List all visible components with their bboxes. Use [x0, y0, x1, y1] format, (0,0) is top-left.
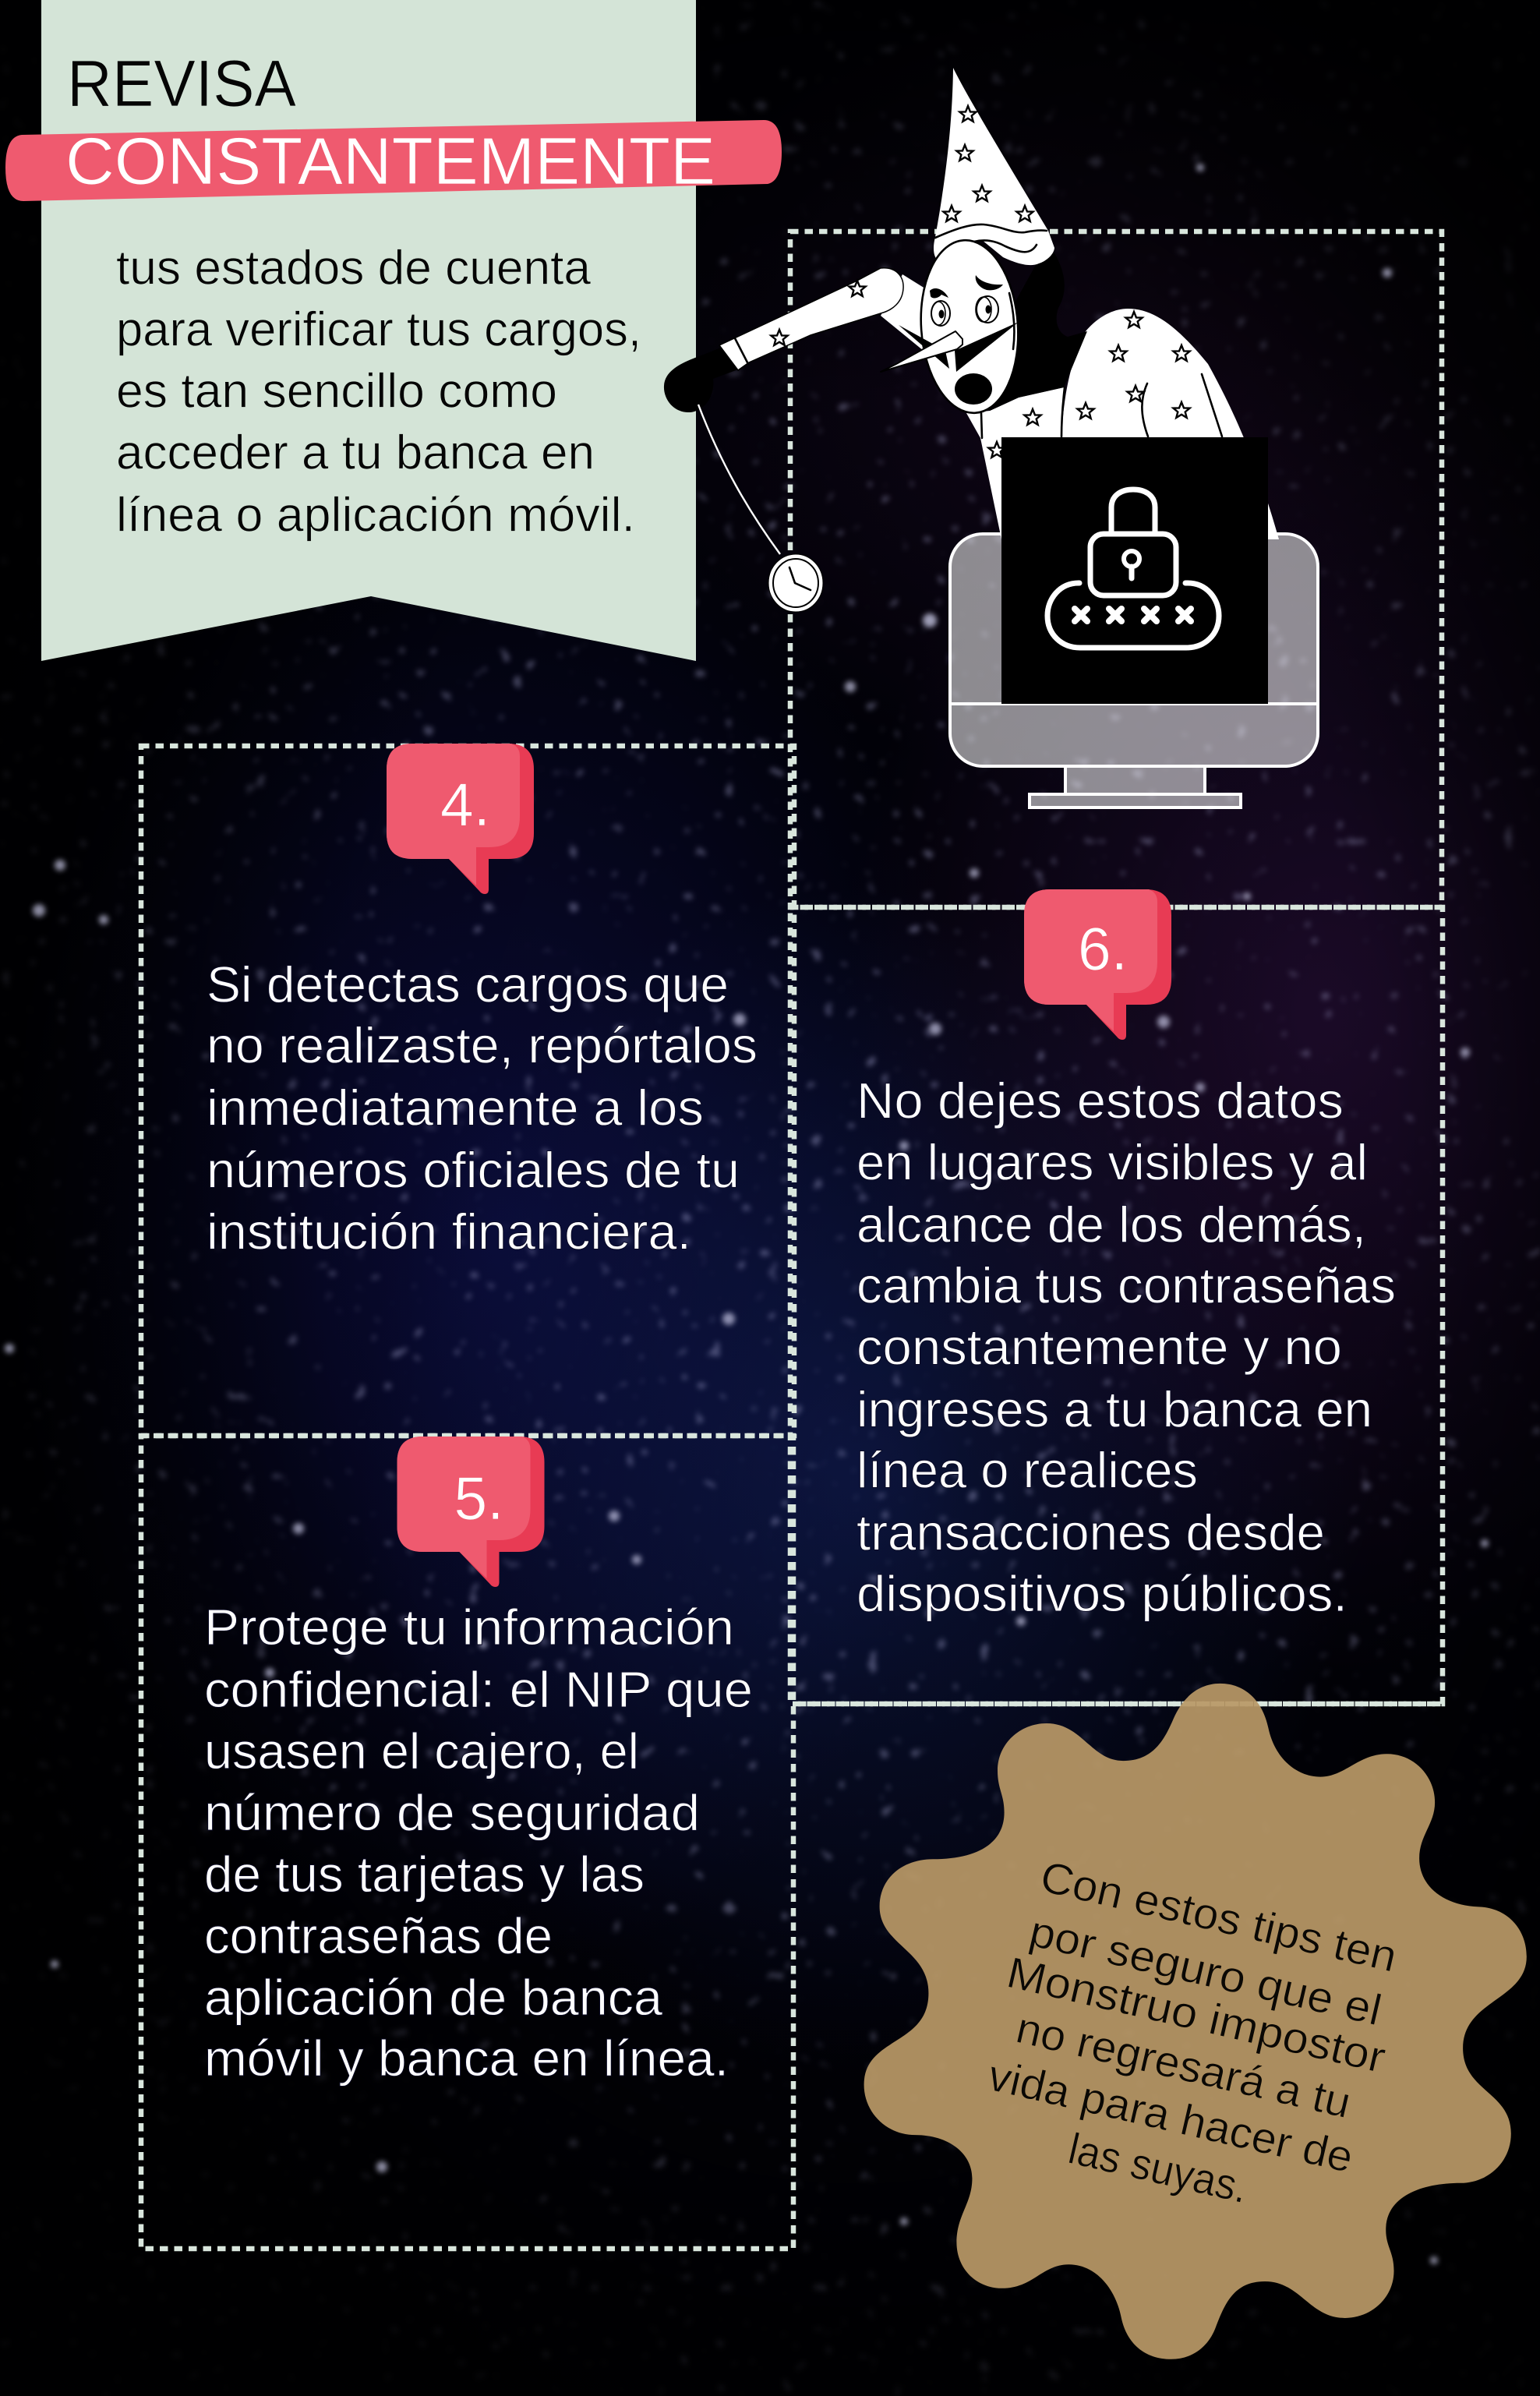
text block: tip 6: línea o realices: [857, 1442, 1198, 1498]
blob shape: [864, 1684, 1527, 2359]
text block: tip 5: móvil y banca en línea.: [204, 2030, 729, 2087]
dashed frame: tip 6: [790, 907, 1443, 1704]
closing text: Monstruo impostor: [1002, 1947, 1390, 2082]
text block: tip 6: alcance de los demás,: [857, 1196, 1366, 1253]
text block: tip 5: confidencial: el NIP que: [204, 1661, 753, 1718]
text block: intro: para verificar tus cargos,: [116, 302, 641, 357]
heading: CONSTANTEMENTE: CONSTANTEMENTE: [65, 125, 715, 199]
wizard hair: [966, 249, 1087, 411]
text block: intro: [116, 242, 641, 542]
text block: tip 6: No dejes estos datos: [857, 1073, 1344, 1129]
wizard mouth: [955, 373, 992, 405]
badge: 4: [387, 744, 534, 894]
illustration: wizard impostor: [664, 68, 1279, 612]
text block: tip 6: dispositivos públicos.: [857, 1565, 1348, 1622]
text block: intro: línea o aplicación móvil.: [116, 488, 635, 542]
pocket watch: [768, 554, 823, 612]
text block: intro: tus estados de cuenta: [116, 242, 592, 295]
text block: intro: es tan sencillo como: [116, 365, 557, 418]
panel: top ribbon banner: [41, 0, 696, 661]
text block: tip 6: [857, 1073, 1396, 1622]
closing text: no regresará a tu: [1012, 2002, 1355, 2127]
text block: tip 4: [207, 956, 758, 1260]
wizard hand: [664, 348, 738, 412]
wizard sleeve and arm: [881, 274, 927, 351]
badge: 6: 6.: [1078, 914, 1128, 983]
text block: tip 6: transacciones desde: [857, 1504, 1325, 1560]
pocket watch string: [698, 405, 780, 554]
heading: REVISA: REVISA: [67, 47, 296, 120]
callout: closing blob: [864, 1684, 1527, 2359]
closing text: Con estos tips ten: [1036, 1851, 1402, 1981]
dashed frame: wizard area: [790, 231, 1442, 907]
icon: password lock on black screen: [1001, 437, 1268, 704]
text block: tip 4: números oficiales de tu: [207, 1141, 740, 1199]
text block: tip 5: aplicación de banca: [204, 1969, 663, 2026]
text block: tip 4: institución financiera.: [207, 1203, 691, 1260]
dashed frame: tip 4: [141, 746, 794, 1436]
badge: 6: [1024, 889, 1171, 1040]
cheek line: [1009, 293, 1014, 349]
text block: intro: acceder a tu banca en: [116, 426, 595, 480]
text block: tip 4: Si detectas cargos que: [207, 956, 729, 1013]
closing text: las suyas.: [1064, 2123, 1252, 2212]
text block: tip 6: cambia tus contraseñas: [857, 1256, 1396, 1314]
wizard head: [915, 237, 1024, 416]
illustration: computer monitor: [950, 534, 1318, 808]
badge: 5: [397, 1437, 544, 1587]
text block: tip 5: contraseñas de: [204, 1907, 553, 1964]
badge: 4: 4.: [440, 770, 490, 839]
text block: tip 5: de tus tarjetas y las: [204, 1846, 645, 1903]
text block: tip 6: en lugares visibles y al: [857, 1133, 1368, 1191]
text block: tip 5: número de seguridad: [204, 1784, 700, 1841]
text block: tip 5: usasen el cajero, el: [204, 1723, 639, 1779]
text block: tip 4: no realizaste, repórtalos: [207, 1016, 758, 1074]
dashed frame: tip 5: [141, 1436, 793, 2249]
text block: tip 6: ingreses a tu banca en: [857, 1381, 1372, 1437]
closing text: [984, 1851, 1402, 2212]
text block: tip 5: Protege tu información: [204, 1599, 734, 1656]
wizard eyebrows: [930, 275, 1003, 298]
heading highlight band: [5, 120, 782, 201]
wizard body: [966, 309, 1279, 539]
closing text: vida para hacer de: [984, 2050, 1358, 2182]
wizard mustache: [899, 322, 1019, 372]
clothing lines: [981, 374, 1222, 438]
text block: tip 6: constantemente y no: [857, 1319, 1342, 1375]
text block: tip 5: [204, 1599, 753, 2087]
wizard nose: [881, 331, 962, 372]
wizard hat: [934, 68, 1054, 265]
wizard costume stars: [771, 106, 1190, 458]
badge: 5: 5.: [454, 1464, 503, 1532]
wizard eyes: [931, 296, 998, 326]
closing text: por seguro que el: [1025, 1906, 1386, 2034]
hat brim line: [935, 224, 1047, 238]
text block: tip 4: inmediatamente a los: [207, 1079, 704, 1136]
